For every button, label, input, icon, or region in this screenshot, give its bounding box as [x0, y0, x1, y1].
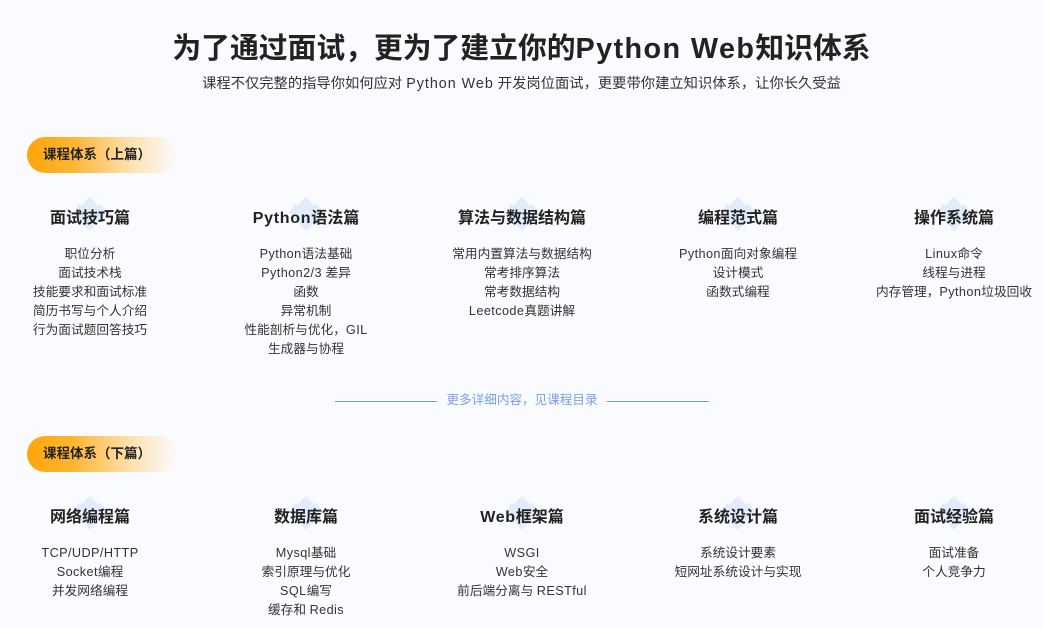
- list: 面试准备: [929, 546, 979, 560]
- heading: 数据库篇: [274, 509, 338, 526]
- list: Socket编程: [57, 565, 123, 579]
- heading: 系统设计篇: [698, 509, 778, 526]
- list: 短网址系统设计与实现: [675, 565, 801, 579]
- list: Web安全: [496, 565, 548, 579]
- icon: diamond: [74, 197, 106, 231]
- list: [675, 546, 801, 579]
- list: 技能要求和面试标准: [33, 285, 147, 299]
- column: 算法与数据结构篇: [452, 197, 592, 318]
- column: 编程范式篇: [679, 197, 797, 299]
- list: Leetcode真题讲解: [469, 304, 575, 318]
- list: 系统设计要素: [700, 546, 776, 560]
- list: [922, 546, 986, 579]
- list: [41, 546, 139, 598]
- title: 为了通过面试，更为了建立你的Python Web知识体系: [172, 33, 871, 65]
- heading: 算法与数据结构篇: [458, 210, 586, 227]
- icon: diamond: [722, 496, 755, 530]
- list: 内存管理，Python垃圾回收: [876, 285, 1032, 299]
- icon: diamond: [721, 197, 754, 231]
- list: 前后端分离与 RESTful: [457, 584, 587, 598]
- icon: diamond: [938, 496, 970, 530]
- list: Linux命令: [925, 247, 983, 261]
- list: 常用内置算法与数据结构: [452, 247, 592, 261]
- list: 常考排序算法: [484, 266, 560, 280]
- subtitle: 课程不仅完整的指导你如何应对 Python Web 开发岗位面试，更要带你建立知识体系，让你长久受益: [202, 76, 841, 92]
- column: 面试技巧篇: [33, 197, 147, 337]
- section pill: lower: [27, 436, 177, 472]
- list: 常考数据结构: [484, 285, 560, 299]
- icon: diamond: [505, 496, 538, 530]
- list: [679, 247, 797, 299]
- list: [33, 247, 147, 337]
- section pill: upper: [27, 137, 177, 173]
- list: [452, 247, 592, 318]
- list: 生成器与协程: [268, 342, 344, 356]
- list: 函数: [293, 285, 319, 299]
- list: [262, 546, 350, 617]
- list: Mysql基础: [276, 546, 336, 560]
- section pill: lower: 课程体系（下篇）: [43, 446, 151, 461]
- list: SQL编写: [280, 584, 332, 598]
- divider note: 更多详细内容，见课程目录: [446, 393, 598, 407]
- list: 设计模式: [713, 266, 763, 280]
- list: 函数式编程: [706, 285, 770, 299]
- list: 个人竞争力: [922, 565, 986, 579]
- icon: diamond: [505, 197, 539, 231]
- list: 简历书写与个人介绍: [33, 304, 147, 318]
- column: Python语法篇: [244, 197, 368, 356]
- icon: diamond: [289, 197, 323, 231]
- column: 操作系统篇: [876, 197, 1032, 299]
- list: 缓存和 Redis: [268, 603, 344, 617]
- heading: 编程范式篇: [698, 210, 778, 227]
- column: Web框架篇: [457, 496, 587, 598]
- heading: 网络编程篇: [50, 509, 130, 526]
- list: [457, 546, 587, 598]
- icon: diamond: [290, 496, 322, 530]
- list: TCP/UDP/HTTP: [41, 546, 139, 560]
- list: 并发网络编程: [52, 584, 128, 598]
- icon: diamond: [938, 197, 970, 231]
- list: [876, 247, 1032, 299]
- list: [244, 247, 368, 356]
- list: Python2/3 差异: [261, 266, 351, 280]
- list: 线程与进程: [922, 266, 986, 280]
- column: 系统设计篇: [675, 496, 801, 579]
- column: 网络编程篇: [41, 496, 139, 598]
- list: 索引原理与优化: [262, 565, 350, 579]
- list: 性能剖析与优化，GIL: [244, 323, 368, 337]
- list: 职位分析: [65, 247, 115, 261]
- heading: 面试技巧篇: [50, 210, 130, 227]
- list: Python面向对象编程: [679, 247, 797, 261]
- list: Python语法基础: [260, 247, 352, 261]
- list: 异常机制: [281, 304, 331, 318]
- heading: Web框架篇: [480, 509, 564, 526]
- heading: Python语法篇: [253, 210, 359, 227]
- heading: 面试经验篇: [914, 509, 994, 526]
- icon: diamond: [75, 496, 106, 530]
- list: WSGI: [504, 546, 540, 560]
- list: 面试技术栈: [58, 266, 122, 280]
- list: 行为面试题回答技巧: [33, 323, 147, 337]
- column: 面试经验篇: [914, 496, 994, 579]
- column: 数据库篇: [262, 496, 350, 617]
- section pill: upper: 课程体系（上篇）: [43, 147, 151, 162]
- heading: 操作系统篇: [914, 210, 994, 227]
